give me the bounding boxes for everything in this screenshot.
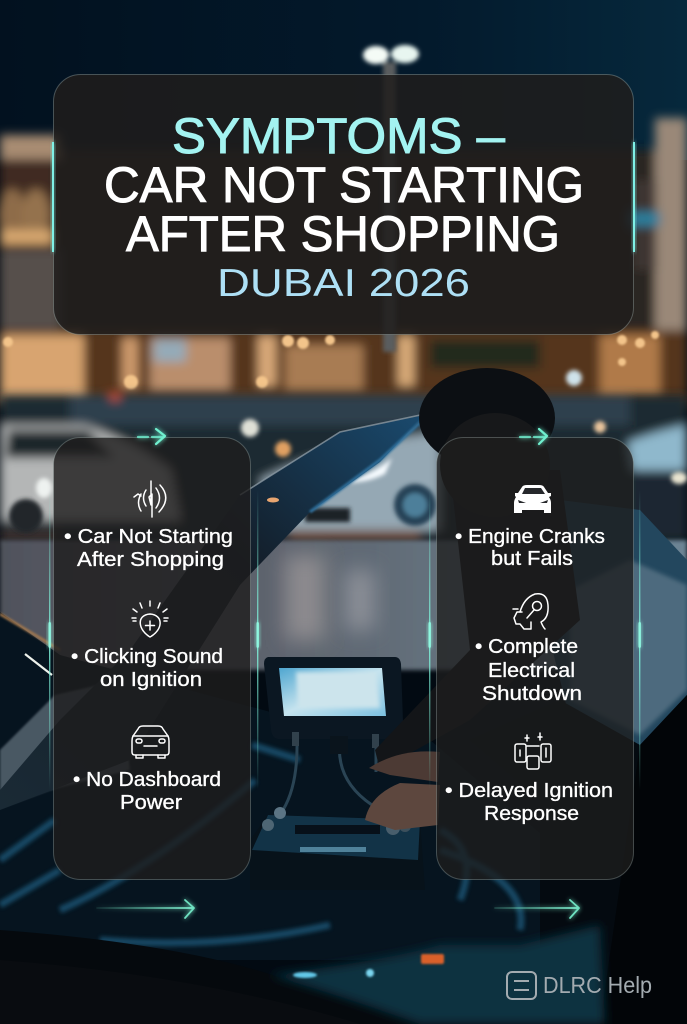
parked cars row [0,391,687,542]
warm bokeh lights [3,331,659,389]
logo: DLRC Help: DLRC Help [543,972,652,998]
logo icon [507,972,536,999]
glow side rails [428,490,641,790]
raised hood [0,415,425,810]
text: no dashboard power [73,768,221,814]
icon: sound waves with lightning [134,481,166,517]
left hood edge and engine bay [0,612,560,960]
mall facade [0,118,687,405]
title text: AFTER SHOPPING [126,206,560,262]
lamp post [363,45,419,352]
text: clicking sound: • Clicking Sound [71,645,223,668]
text: clicking sound [71,645,223,691]
text: complete electrical shutdown: Electrical [488,659,575,682]
icon: warning bulb with plus [132,601,168,637]
arrow: top right [520,429,547,444]
icon: three relays with sparks [515,733,551,769]
arrow: bottom right [495,900,579,918]
text: engine cranks [455,525,605,570]
text: delayed ignition response: Response [484,802,579,825]
text: delayed ignition response: • Delayed Ignition [445,779,613,802]
logo: DLRC Help [507,972,652,999]
text: engine cranks: but Fails [491,547,573,570]
arrow: top left [138,429,165,444]
text: complete electrical shutdown [475,635,582,705]
title text: SYMPTOMS – [172,108,505,164]
diagnostic tablet [264,657,403,810]
title glow bars [52,142,635,252]
text: engine cranks: • Engine Cranks [455,525,605,548]
text: no dashboard power: Power [120,791,182,814]
panel: title [52,74,635,334]
car body foreground [0,930,420,1024]
technician [365,368,687,1024]
text: car not starting [64,525,233,571]
icon: head with magnifier [513,594,548,629]
car battery [250,807,425,890]
text: clicking sound: on Ignition [100,668,202,691]
glow side rails [48,490,259,790]
text: no dashboard power: • No Dashboard [73,768,221,791]
wet ground [0,540,687,670]
text: delayed ignition response [445,779,613,825]
text: complete electrical shutdown: Shutdown [482,682,582,705]
title text: CAR NOT STARTING [104,157,584,213]
icon: solid car [514,485,551,513]
panel: left symptoms [48,429,259,880]
text: car not starting: After Shopping [77,548,224,571]
title text [104,108,584,305]
title text: DUBAI 2026 [217,262,470,305]
text: car not starting: • Car Not Starting [64,525,233,548]
icon: car outline [132,726,169,758]
text: complete electrical shutdown: • Complete [475,635,578,658]
panel: right symptoms [428,429,641,880]
arrow: bottom left [97,900,194,918]
